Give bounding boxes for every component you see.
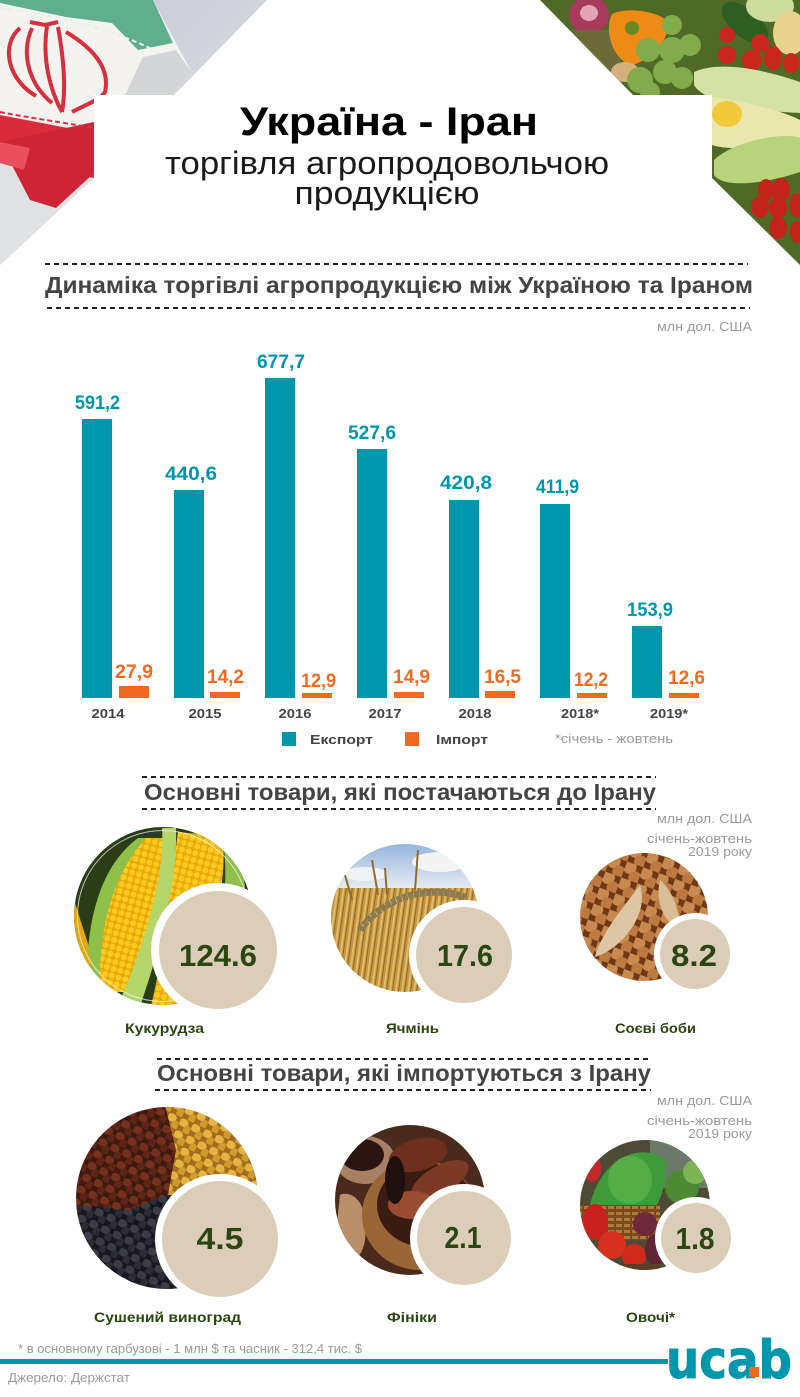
- item: vegetables: [578, 1138, 737, 1325]
- label: corn: Кукурудза: [125, 1020, 204, 1036]
- heading: trade dynamics: Динаміка торгівлі агропродукцією між Україною та Іраном: [45, 272, 753, 298]
- export values: 677,7: [257, 352, 305, 373]
- item: raisins: [75, 1105, 285, 1325]
- photo: vegetables basket: [578, 1138, 712, 1274]
- import values: 14,2: [207, 667, 244, 688]
- value badge: barley: 17.6: [437, 938, 493, 973]
- export values: 440,6: [165, 464, 217, 485]
- label: barley: Ячмінь: [386, 1020, 439, 1036]
- export values: 153,9: [627, 600, 673, 621]
- heading: exports to Iran: Основні товари, які постачаються до Ірану: [144, 779, 656, 805]
- unit note: exports: млн дол. США: [657, 811, 752, 826]
- item: corn: [70, 820, 285, 1036]
- value badge: dates: [410, 1184, 518, 1292]
- import bars: [119, 686, 699, 698]
- item: barley: [330, 840, 519, 1036]
- unit note: exports: 2019 року: [688, 844, 753, 859]
- export values: 420,8: [440, 473, 492, 494]
- unit note: imports: 2019 року: [688, 1126, 753, 1141]
- item: dates: [335, 1120, 518, 1325]
- import values: 12,9: [301, 671, 336, 692]
- import values: 12,2: [574, 670, 608, 691]
- year axis labels: 2015: [188, 706, 222, 721]
- year axis labels: 2018: [458, 706, 492, 721]
- subtitle: торгівля агропродовольчою: [165, 145, 609, 181]
- source: Джерело: Держстат: [8, 1370, 130, 1385]
- unit note: imports: січень-жовтень: [647, 1113, 752, 1128]
- heading: imports from Iran: Основні товари, які імпортуються з Ірану: [157, 1060, 651, 1086]
- value badge: soybeans: [654, 913, 736, 995]
- bar chart: export and import: [75, 352, 705, 721]
- export values: [75, 352, 673, 621]
- value badge: barley: [409, 900, 519, 1010]
- year axis labels: 2019*: [650, 706, 689, 721]
- unit note: imports: [647, 1093, 753, 1141]
- unit note: млн дол. США: [657, 319, 752, 334]
- label: raisins: Сушений виноград: [94, 1309, 241, 1325]
- photo: corn: [74, 827, 248, 1005]
- import values: 16,5: [484, 667, 521, 688]
- title: Україна - Іран: [240, 100, 538, 144]
- year axis labels: [92, 706, 689, 721]
- unit note: imports: млн дол. США: [657, 1093, 752, 1108]
- label: dates: Фініки: [387, 1309, 437, 1325]
- photo: raisins: [75, 1105, 260, 1295]
- item: soybeans: [578, 850, 736, 1036]
- value badge: vegetables: [655, 1197, 737, 1279]
- value badge: corn: 124.6: [179, 938, 257, 973]
- export values: 591,2: [75, 393, 120, 414]
- import values: 27,9: [115, 662, 153, 683]
- export values: 527,6: [348, 423, 396, 444]
- year axis labels: 2014: [92, 706, 125, 721]
- export values: 411,9: [536, 477, 579, 498]
- subtitle: продукцією: [294, 175, 480, 211]
- year axis labels: 2017: [368, 706, 402, 721]
- legend: [282, 732, 488, 747]
- legend: Імпорт: [436, 732, 488, 747]
- unit note: exports: січень-жовтень: [647, 831, 752, 846]
- footnote: * в основному гарбузові - 1 млн $ та часник - 312,4 тис. $: [18, 1341, 363, 1356]
- value badge: vegetables: 1.8: [676, 1221, 714, 1256]
- photo: soybeans: [578, 850, 710, 985]
- value badge: dates: 2.1: [444, 1220, 482, 1255]
- year axis labels: 2016: [278, 706, 312, 721]
- photo: barley: [330, 840, 480, 1000]
- year axis labels: 2018*: [561, 706, 600, 721]
- import values: 14,9: [393, 667, 430, 688]
- subtitle: [165, 145, 609, 211]
- import values: [115, 662, 705, 692]
- export bars: [82, 378, 662, 698]
- photo: vegetables: [530, 0, 800, 270]
- photo: dates: [335, 1120, 485, 1280]
- value badge: raisins: [155, 1174, 285, 1304]
- label: soybeans: Соєві боби: [615, 1020, 696, 1036]
- photo: Iranian flag: [0, 0, 270, 270]
- unit note: exports: [647, 811, 753, 859]
- legend: Експорт: [310, 732, 373, 747]
- label: vegetables: Овочі*: [626, 1309, 676, 1325]
- value badge: corn: [151, 883, 285, 1017]
- value badge: raisins: 4.5: [196, 1221, 244, 1256]
- footer rule: [0, 1359, 668, 1364]
- import values: 12,6: [668, 668, 705, 689]
- value badge: soybeans: 8.2: [671, 938, 717, 973]
- period note: *січень - жовтень: [555, 731, 673, 746]
